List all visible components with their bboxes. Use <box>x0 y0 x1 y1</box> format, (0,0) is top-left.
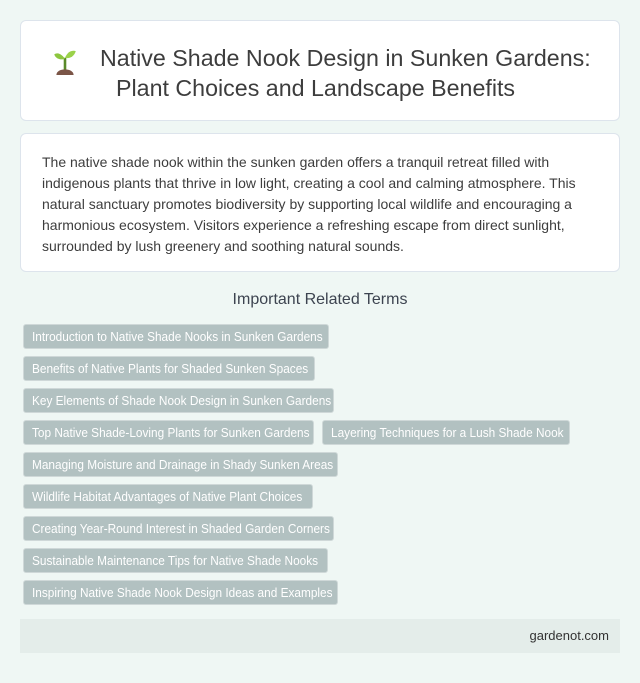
tag 10 <box>23 580 338 605</box>
tag 3 <box>23 388 334 413</box>
title <box>100 45 591 101</box>
tag 9: Sustainable Maintenance Tips for Native Shade Nooks <box>32 553 318 568</box>
tag 2 <box>23 356 315 381</box>
tag 5 <box>322 420 570 445</box>
footer: gardenot.com <box>530 628 609 643</box>
tag 6: Managing Moisture and Drainage in Shady Sunken Areas <box>32 457 333 472</box>
title: Native Shade Nook Design in Sunken Gardens: <box>100 45 591 71</box>
tag 6 <box>23 452 338 477</box>
tag 2: Benefits of Native Plants for Shaded Sunken Spaces <box>32 361 308 376</box>
tag 8: Creating Year-Round Interest in Shaded Garden Corners <box>32 521 330 536</box>
icon: seedling <box>54 50 76 75</box>
tag 1 <box>23 324 329 349</box>
tag 10: Inspiring Native Shade Nook Design Ideas and Examples <box>32 585 333 600</box>
tag 3: Key Elements of Shade Nook Design in Sunken Gardens <box>32 393 331 408</box>
tag 1: Introduction to Native Shade Nooks in Sunken Gardens <box>32 329 323 344</box>
tag 4: Top Native Shade-Loving Plants for Sunken Gardens <box>32 425 310 440</box>
description card: The native shade nook within the sunken garden offers a tranquil retreat filled with indigenous plants that thrive in low light, creating a cool and calming atmosphere. This natural sanctuary promotes biodiversity by supporting local wildlife and encouraging a harmonious ecosystem. Visitors experience a refreshing escape from direct sunlight, surrounded by lush greenery and soothing natural sounds. <box>42 154 576 254</box>
tag 7: Wildlife Habitat Advantages of Native Plant Choices <box>32 489 302 504</box>
heading: related terms: Important Related Terms <box>233 291 407 308</box>
tag 9 <box>23 548 328 573</box>
header card <box>20 20 620 121</box>
tag 8 <box>23 516 334 541</box>
description card <box>20 133 620 272</box>
tag 4 <box>23 420 314 445</box>
tag 7 <box>23 484 313 509</box>
footer <box>20 619 620 653</box>
tag 5: Layering Techniques for a Lush Shade Nook <box>331 425 564 440</box>
title: Plant Choices and Landscape Benefits <box>116 75 515 101</box>
